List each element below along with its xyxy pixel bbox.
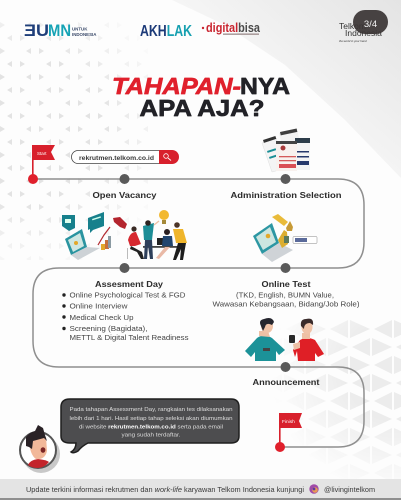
step marker: open vacancy — [120, 174, 130, 184]
text: online test details — [212, 290, 360, 308]
illustration: laptop and folders — [253, 214, 317, 262]
search bar — [72, 150, 179, 164]
callout speech bubble: yang sudah terdaftar. — [122, 432, 180, 438]
icon: CV documents — [262, 128, 310, 172]
list: assesment day items: Online Psychological Test & FGD — [70, 290, 186, 300]
callout speech bubble — [61, 399, 239, 453]
logo: AKHLAK: AKHLAK — [140, 23, 193, 40]
heading: announcement: Announcement — [252, 377, 320, 387]
start flag: Start — [37, 151, 47, 156]
background: triangle pattern right — [308, 320, 401, 458]
step marker: assesment day — [120, 263, 130, 273]
logo: BUMN untuk Indonesia: ƎU — [24, 21, 49, 40]
title: NYA — [240, 73, 290, 99]
footer bar — [0, 479, 401, 500]
title — [112, 73, 290, 121]
icon: instagram — [309, 484, 319, 494]
heading: online test: Online Test — [262, 279, 311, 289]
page badge 3/4 — [353, 10, 388, 34]
text: online test details: Wawasan Kebangsaan, Bidang/Job Role) — [212, 300, 360, 308]
logo: digitalbisa: digitalbisa — [206, 21, 261, 35]
callout speech bubble: di website rekrutmen.telkom.co.id serta pada email — [79, 424, 223, 430]
logo: Telkom Indonesia — [339, 21, 382, 43]
heading: assesment day: Assesment Day — [95, 279, 163, 289]
heading: open vacancy: Open Vacancy — [92, 190, 157, 200]
footer text: Update terkini informasi rekrutmen dan work-life karyawan Telkom Indonesia kunjungi — [26, 486, 304, 494]
logo: BUMN untuk Indonesia: UNTUK — [72, 26, 88, 32]
avatar: character in circle — [20, 425, 60, 473]
list: assesment day items: Medical Check Up — [70, 313, 134, 322]
list: assesment day items: METTL & Digital Talent Readiness — [70, 333, 189, 342]
finish flag: Finish — [282, 419, 295, 425]
logo: BUMN untuk Indonesia — [24, 21, 97, 40]
step marker: online test top — [280, 263, 290, 273]
list: assesment day items — [62, 290, 189, 342]
logo: Telkom Indonesia: Indonesia — [345, 28, 382, 38]
logo: BUMN untuk Indonesia: MN — [48, 21, 71, 40]
callout speech bubble: lebih dari 1 hari. Hasil setiap tahap seleksi akan diumumkan — [70, 416, 233, 422]
illustration: two people with phones — [245, 318, 324, 361]
title: APA AJA? — [140, 95, 264, 121]
step marker: administration — [280, 174, 290, 184]
list: assesment day items: Online Interview — [70, 302, 128, 310]
logo: Telkom Indonesia: the world in your hand — [339, 39, 367, 43]
step marker: announcement — [280, 362, 290, 372]
illustration: laptop and charts — [62, 212, 127, 260]
logo: Telkom Indonesia: Telkom — [339, 21, 366, 31]
illustration: team around table — [127, 210, 187, 260]
list: assesment day items: Screening (Bagidata), — [70, 324, 148, 333]
callout speech bubble: Pada tahapan Assessment Day, rangkaian tes dilaksanakan — [70, 407, 233, 413]
background: grey diagonal corner — [172, 0, 401, 178]
search bar: rekrutmen.telkom.co.id — [79, 155, 154, 162]
finish flag — [275, 413, 302, 452]
page badge 3/4: 3/4 — [364, 19, 377, 30]
heading: administration selection: Administration Selection — [230, 190, 342, 200]
logo: BUMN untuk Indonesia: INDONESIA — [72, 32, 97, 37]
process path — [33, 179, 364, 447]
text: online test details: (TKD, English, BUMN Value, — [236, 290, 334, 300]
start flag — [28, 145, 55, 184]
instagram handle: @livingintelkom — [324, 486, 375, 494]
background: triangle pattern left — [0, 20, 150, 260]
title: TAHAPAN- — [112, 73, 241, 99]
